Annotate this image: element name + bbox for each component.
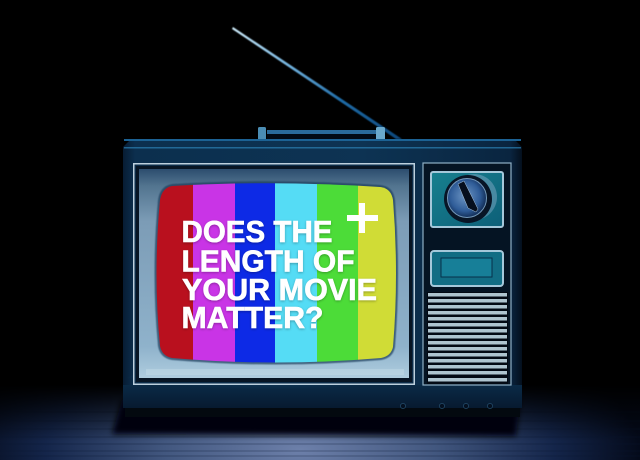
title: YOUR MOVIE — [182, 273, 377, 307]
dial knob — [458, 181, 478, 212]
title — [182, 215, 377, 335]
control panel — [423, 163, 511, 385]
carrying handle — [258, 127, 385, 141]
TV cabinet — [120, 139, 522, 417]
title: DOES THE — [182, 215, 332, 249]
wooden floor — [0, 385, 640, 460]
antenna — [232, 27, 402, 139]
screen edge shadow — [154, 181, 398, 364]
dial housing — [431, 172, 503, 227]
TV shadow on floor — [112, 400, 520, 436]
screen bezel — [133, 163, 415, 385]
TV screen colour bars — [156, 183, 396, 362]
title: LENGTH OF — [182, 244, 354, 278]
speaker grille — [427, 292, 508, 384]
front buttons — [400, 403, 493, 409]
label plate — [431, 251, 503, 286]
title: MATTER? — [182, 301, 324, 335]
plus icon — [347, 203, 378, 233]
